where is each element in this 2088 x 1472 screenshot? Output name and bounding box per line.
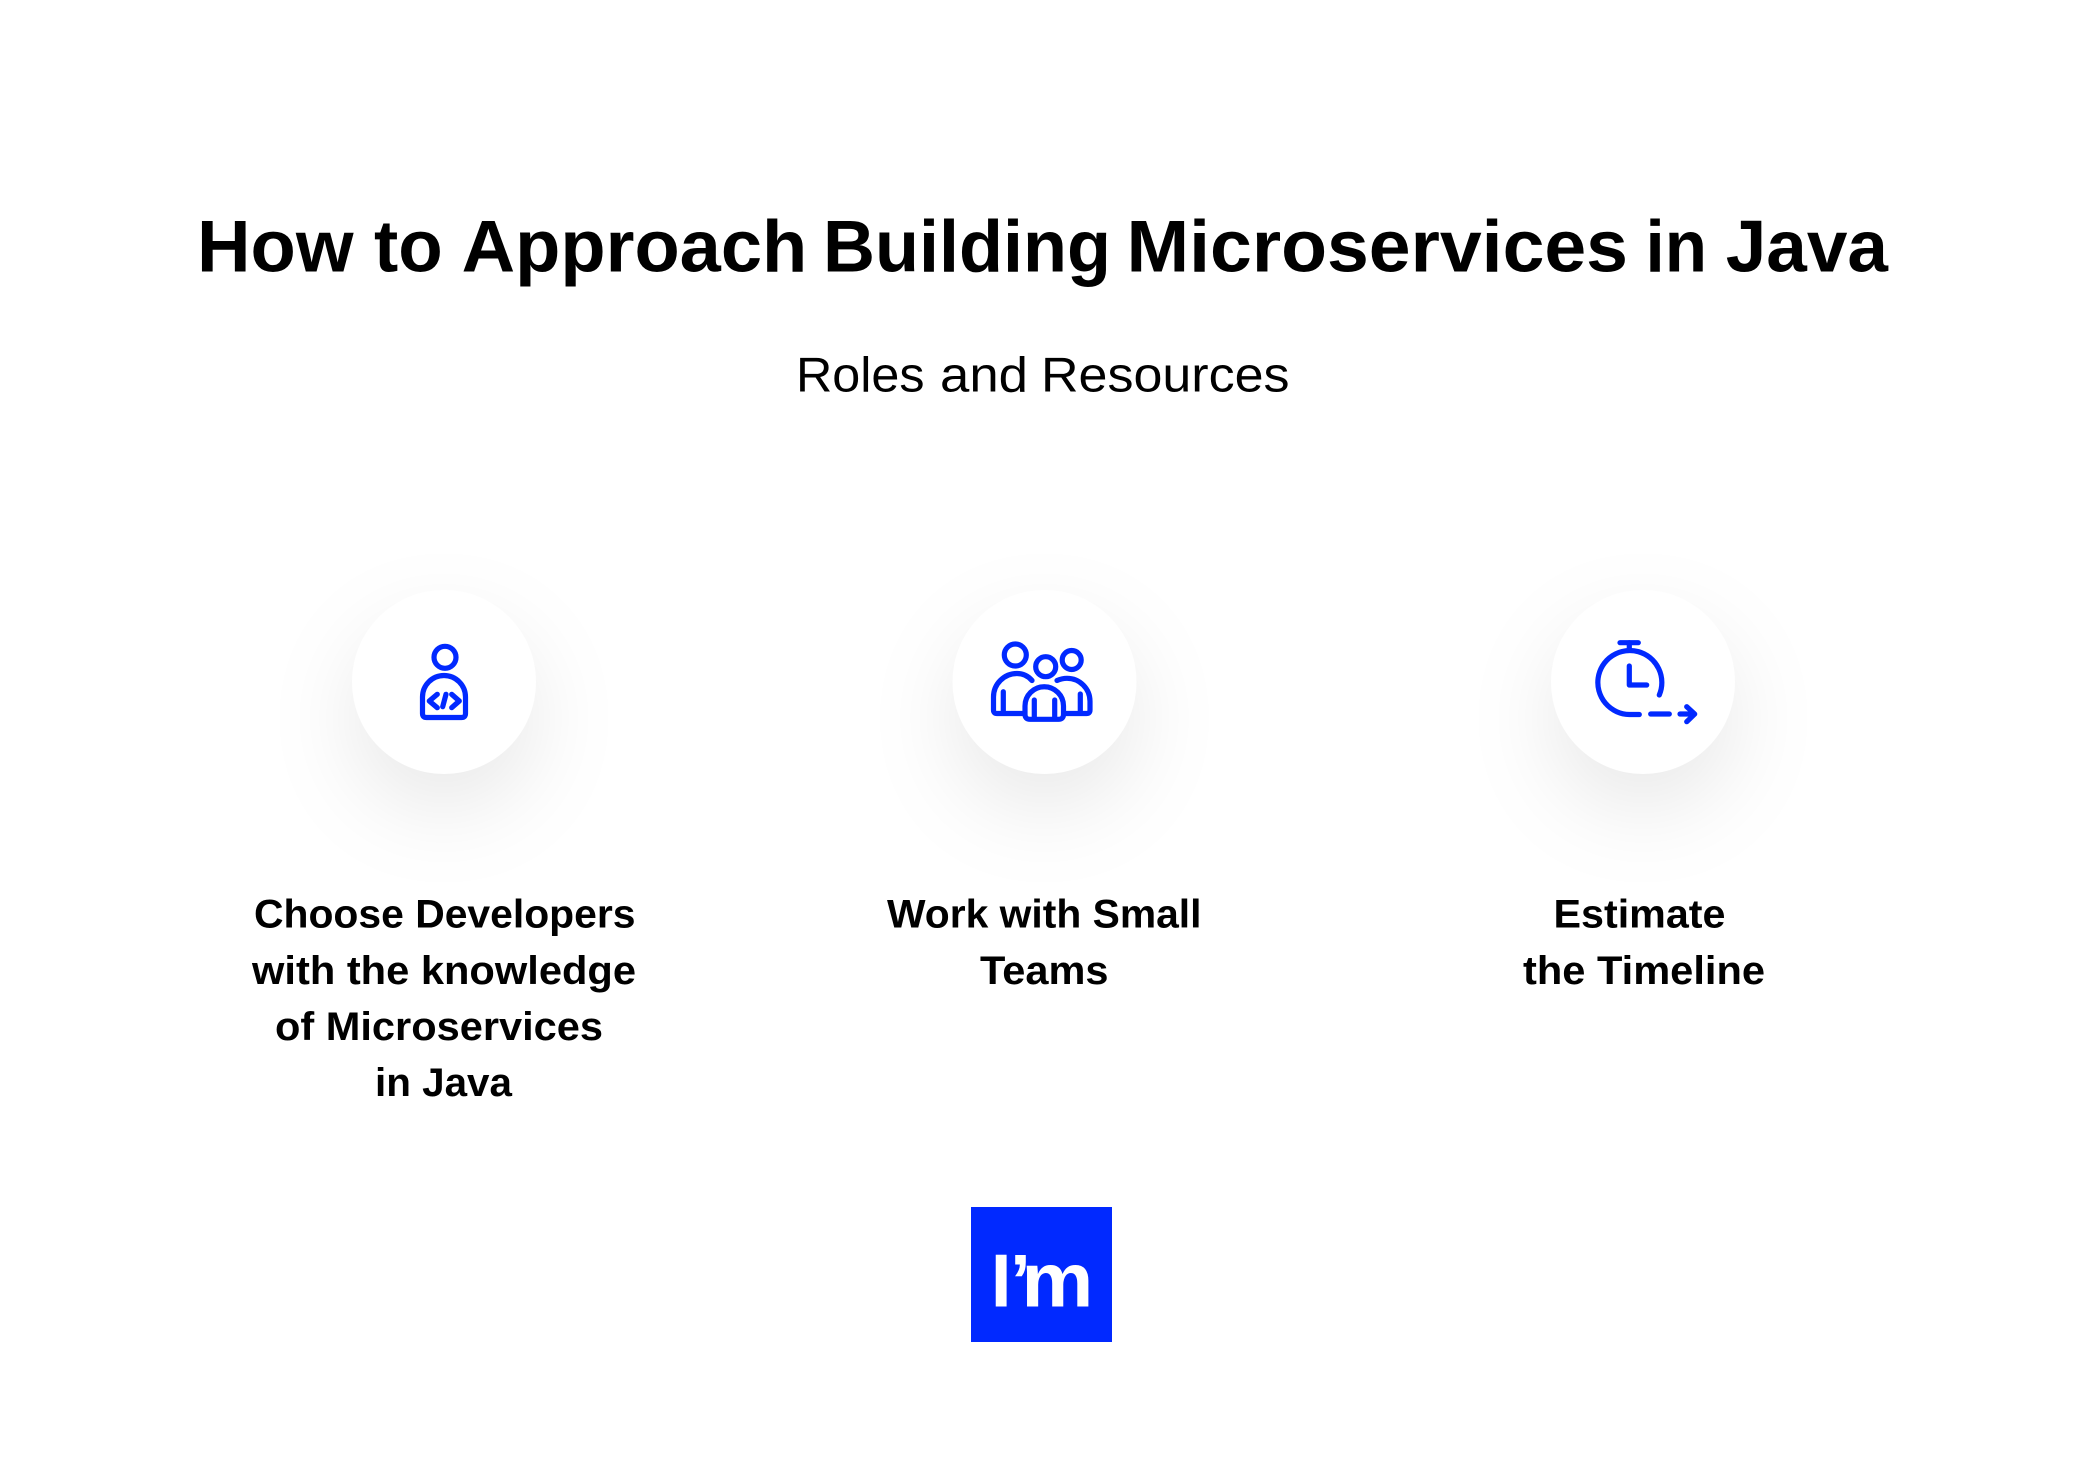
label: timeline: the Timeline (1523, 949, 1765, 993)
title: Building (823, 207, 1111, 288)
label: timeline (1523, 893, 1765, 993)
icon: developer (352, 590, 536, 774)
label: choose developers: Choose Developers (254, 893, 636, 937)
label: small teams: Teams (980, 949, 1108, 993)
panel: choose developers (251, 590, 636, 1105)
label: small teams (887, 893, 1202, 993)
title: How (197, 207, 354, 288)
icon: team (952, 590, 1136, 774)
label: choose developers (251, 893, 636, 1105)
label: small teams: Work with Small (887, 893, 1202, 937)
panel: timeline (1523, 590, 1765, 993)
title: Java (1726, 207, 1889, 288)
title (197, 207, 1889, 288)
logo (971, 1207, 1112, 1342)
icon: stopwatch (1551, 590, 1735, 774)
title: in (1646, 207, 1707, 288)
title: to (374, 207, 443, 288)
subtitle (796, 349, 1290, 403)
label: choose developers: with the knowledge (251, 949, 636, 993)
panel: small teams (887, 590, 1202, 993)
label: choose developers: in Java (375, 1061, 513, 1105)
label: choose developers: of Microservices (275, 1005, 603, 1049)
logo: m (1021, 1238, 1093, 1324)
label: timeline: Estimate (1554, 893, 1726, 937)
subtitle: and (940, 349, 1028, 403)
logo: ’ (1010, 1239, 1031, 1323)
logo: I (991, 1239, 1012, 1323)
subtitle: Resources (1041, 349, 1290, 403)
title: Approach (462, 207, 807, 288)
title: Microservices (1126, 207, 1628, 288)
subtitle: Roles (796, 349, 924, 403)
